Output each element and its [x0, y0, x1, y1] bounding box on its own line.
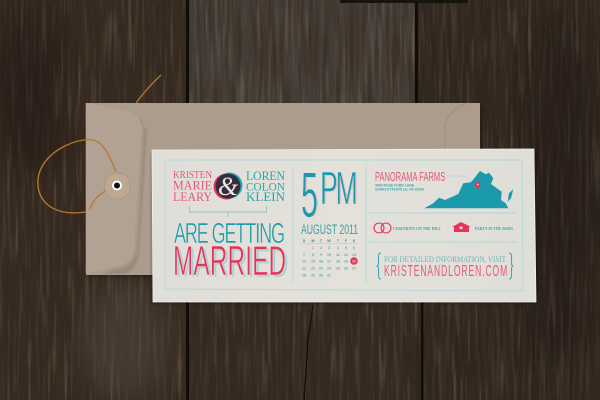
- website intro: FOR DETAILED INFORMATION, VISIT: [384, 255, 506, 264]
- address: CHARLOTTESVILLE, VA 22936: [375, 188, 424, 192]
- month heading: AUGUST 2011: [301, 222, 358, 238]
- calendar dates: 28: [302, 274, 306, 278]
- envelope flap: [86, 103, 141, 273]
- calendar dates: 23: [319, 266, 323, 270]
- calendar dates: 8: [312, 253, 314, 257]
- married: MARRIED: [176, 240, 289, 287]
- venue name: PANORAMA FARMS: [375, 171, 445, 185]
- bride name: KRISTEN: [173, 170, 212, 181]
- address: 3964 ROSE FORD LANE: [375, 184, 415, 188]
- calendar dates: 27: [352, 266, 356, 270]
- calendar dates: 24: [327, 266, 331, 270]
- calendar dates: 2: [320, 246, 322, 250]
- time: 5: [301, 159, 318, 231]
- envelope: [86, 103, 482, 277]
- panel: time and calendar: [301, 159, 359, 278]
- leader line: [446, 176, 472, 182]
- calendar dates: 5: [345, 246, 347, 250]
- ampersand badge: &: [218, 172, 239, 201]
- groom name: COLON: [246, 180, 285, 194]
- envelope flap shadow: [100, 116, 147, 274]
- calendar dates: 9: [320, 253, 322, 257]
- time: 5: [302, 160, 319, 232]
- calendar dates: 22: [311, 266, 315, 270]
- calendar dates: 14: [302, 260, 306, 264]
- calendar dates: 15: [311, 260, 315, 264]
- weekday header: S: [353, 239, 356, 243]
- calendar dates: 6: [353, 246, 355, 250]
- invitation card: [152, 149, 536, 302]
- calendar dates: [302, 246, 356, 278]
- string loop: [38, 140, 116, 213]
- bride name: LEARY: [173, 189, 213, 204]
- weekday header: T: [320, 239, 323, 243]
- calendar dates: 21: [302, 266, 306, 270]
- website url: KRISTENANDLOREN.COM: [384, 262, 507, 280]
- weekday header: S: [303, 239, 306, 243]
- icon: wedding rings: [374, 223, 391, 233]
- weekday header: T: [337, 239, 340, 243]
- address: [375, 184, 424, 192]
- calendar dates: 31: [327, 274, 331, 278]
- calendar dates: 11: [336, 253, 340, 257]
- icon: barn: [452, 222, 471, 232]
- weekday header: W: [327, 239, 331, 243]
- panel: names: [173, 168, 289, 287]
- weekday header: [303, 239, 356, 243]
- are getting: ARE GETTING: [174, 218, 285, 250]
- ceremony label: CEREMONY ON THE HILL: [393, 226, 441, 231]
- highlighted date: 20: [352, 259, 356, 263]
- calendar dates: 3: [328, 246, 330, 250]
- calendar dates: 7: [303, 253, 305, 257]
- calendar dates: 13: [352, 253, 356, 257]
- time: PM: [320, 162, 358, 214]
- weekday header: M: [312, 239, 314, 243]
- party label: PARTY IN THE BARN: [475, 226, 514, 231]
- calendar dates: 18: [336, 260, 340, 264]
- bride name: MARIE: [173, 178, 212, 192]
- calendar dates: 26: [344, 266, 348, 270]
- string end behind envelope: [136, 75, 161, 103]
- calendar dates: 1: [312, 246, 314, 250]
- calendar dates: 25: [336, 266, 340, 270]
- married: MARRIED: [173, 238, 286, 285]
- button closure: [104, 173, 130, 199]
- calendar dates: 29: [311, 274, 315, 278]
- calendar dates: 10: [327, 253, 331, 257]
- groom name: LOREN: [246, 168, 286, 183]
- calendar dates: 17: [327, 260, 331, 264]
- calendar dates: 12: [344, 253, 348, 257]
- groom name: KLEIN: [246, 189, 286, 204]
- map pin: [476, 182, 480, 190]
- map of Virginia: [424, 171, 513, 208]
- calendar dates: 19: [344, 260, 348, 264]
- calendar dates: 30: [319, 274, 323, 278]
- left brace: [376, 253, 381, 279]
- bride name: [173, 170, 213, 204]
- right brace: [509, 253, 514, 279]
- panel: venue: [374, 171, 514, 280]
- time: [301, 159, 359, 232]
- time: PM: [321, 163, 359, 214]
- card frame lines: [165, 160, 523, 291]
- calendar dates: 4: [337, 246, 339, 250]
- groom name: [246, 168, 286, 204]
- card shadow: [151, 152, 538, 304]
- calendar dates: 16: [319, 260, 323, 264]
- bracket: [190, 206, 266, 217]
- weekday header: F: [345, 239, 348, 243]
